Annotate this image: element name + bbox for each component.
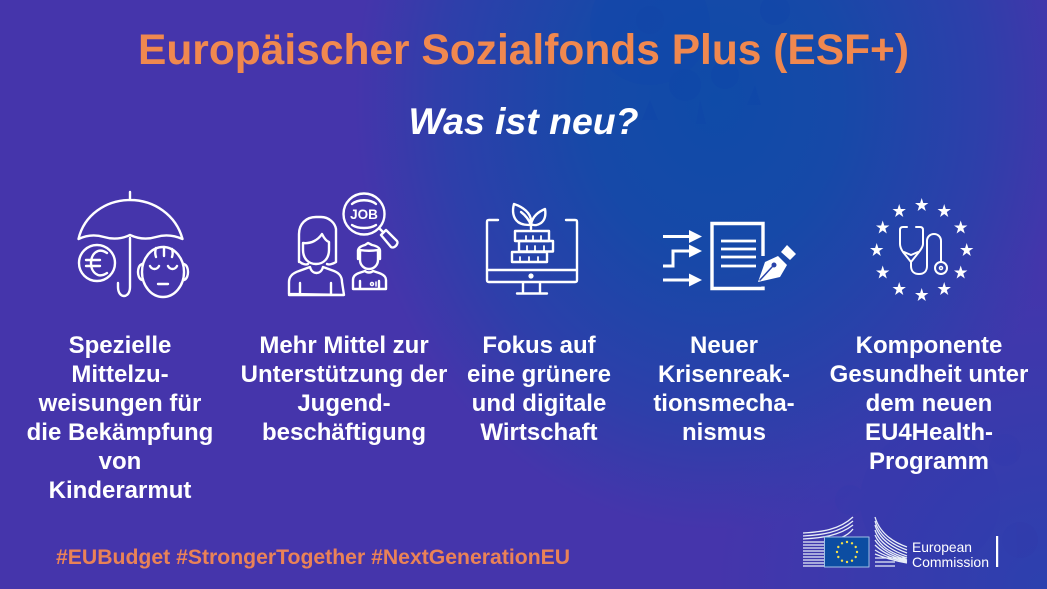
text: green and digital economy: und digitale [472, 390, 606, 417]
text: green and digital economy: eine grünere [467, 361, 611, 388]
title: Europäischer Sozialfonds Plus (ESF+) [138, 27, 909, 74]
text: health component: Gesundheit unter [830, 361, 1028, 388]
text: child poverty: von [99, 448, 141, 475]
text: green and digital economy [467, 332, 611, 446]
text: health component: EU4Health- [865, 419, 993, 446]
text: child poverty: Spezielle [69, 332, 171, 359]
text: health component: dem neuen [866, 390, 992, 417]
logo: European Commission: Commission [912, 554, 989, 570]
text: green and digital economy: Wirtschaft [480, 419, 598, 446]
text: youth employment: Unterstützung der [241, 361, 447, 388]
text: crisis reaction mechanism [653, 332, 795, 446]
text: health component [830, 332, 1028, 475]
text: youth employment: Jugend- [297, 390, 391, 417]
text: health component: Programm [869, 448, 989, 475]
text: green and digital economy: Fokus auf [482, 332, 596, 359]
hashtags: #EUBudget #StrongerTogether #NextGenerationEU [56, 546, 570, 569]
text: child poverty [27, 332, 213, 504]
text: crisis reaction mechanism: Krisenreak- [658, 361, 790, 388]
icon: woman and young person with job search magnifier: JOB [350, 207, 378, 222]
icon: umbrella with euro coin and child's face [78, 192, 188, 297]
text: youth employment [241, 332, 447, 446]
icon: stethoscope in ring of EU stars [870, 198, 973, 301]
logo: European Commission: European [912, 539, 972, 555]
text: child poverty: die Bekämpfung [27, 419, 213, 446]
text: youth employment: Mehr Mittel zur [259, 332, 429, 359]
icon: arrows into document with fountain pen [663, 224, 796, 288]
text: child poverty: weisungen für [39, 390, 201, 417]
text: crisis reaction mechanism: nismus [682, 419, 766, 446]
text: youth employment: beschäftigung [262, 419, 426, 446]
subtitle: Was ist neu? [409, 100, 638, 142]
text: crisis reaction mechanism: tionsmecha- [653, 390, 795, 417]
text: child poverty: Kinderarmut [49, 477, 191, 504]
text: crisis reaction mechanism: Neuer [690, 332, 758, 359]
text: health component: Komponente [856, 332, 1002, 359]
icon: computer with coins and plant [487, 204, 577, 294]
logo: European Commission [803, 517, 998, 570]
icon: woman and young person with job search magnifier [289, 194, 397, 295]
text: child poverty: Mittelzu- [71, 361, 169, 388]
